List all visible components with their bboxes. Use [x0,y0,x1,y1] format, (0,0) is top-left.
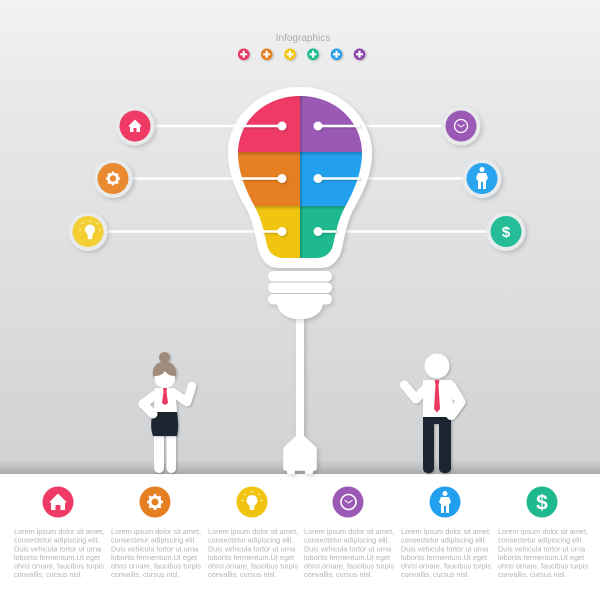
body text: ohrci ornare, faucibus turpis [14,562,104,570]
body text: convallis, cursus nisl. [498,570,567,579]
column: dollar [498,486,588,579]
icon badge: dollar [486,212,526,251]
circle icon: bulb [236,486,268,518]
bulb colour segments [238,96,362,258]
body text: convallis, cursus nisl. [401,570,470,579]
body text: lobortis fermentum.Ut eget [304,553,390,562]
body text: convallis, cursus nisl. [208,570,277,579]
woman shirt and arms [143,386,192,414]
man head [424,354,450,378]
column: bulb [208,486,298,579]
body text: Lorem ipsum dolor sit amet, [304,527,394,536]
man trousers [423,416,451,473]
column: gear [111,486,201,579]
body text: convallis, cursus nisl. [111,570,180,579]
icon badge: person [462,159,502,198]
body text: lobortis fermentum.Ut eget [498,553,584,562]
body text: consectetur adipiscing elit. [498,536,584,545]
bottom white panel [0,474,600,600]
body text: ohrci ornare, faucibus turpis [111,562,201,570]
column: person [401,486,491,579]
man figure [404,354,460,473]
circle icon: clock [332,486,364,518]
body text: Duis vehicula tortor ut urna [401,544,489,553]
icon badge: gear [94,159,132,198]
body text: Lorem ipsum dolor sit amet, [208,527,298,536]
body text: lobortis fermentum.Ut eget [111,553,197,562]
icon badge: dollar: $ [502,224,511,241]
body text: lobortis fermentum.Ut eget [14,553,100,562]
woman tie [162,388,168,405]
screw base [268,271,332,319]
body text: consectetur adipiscing elit. [14,536,100,545]
connector lines and dots inside bulb [240,122,360,236]
column: home [14,486,104,579]
body text: Duis vehicula tortor ut urna [208,544,296,553]
body text: Lorem ipsum dolor sit amet, [14,527,104,536]
body text: ohrci ornare, faucibus turpis [498,562,588,570]
icon badge: bulb [68,212,108,251]
floor shadow band [0,460,600,474]
background wall [0,0,600,474]
man tie [434,380,440,412]
woman figure [143,352,192,473]
icon badge: home [116,106,154,146]
circle icon: home [42,486,74,518]
man shirt and arms [404,380,460,417]
woman skirt [151,412,178,436]
body text: Duis vehicula tortor ut urna [498,544,586,553]
circle icon: gear [140,486,170,518]
title: Infographics [276,33,330,44]
circle icon: dollar: $ [536,492,548,514]
woman hair [153,352,176,385]
body text: consectetur adipiscing elit. [304,536,390,545]
body text: ohrci ornare, faucibus turpis [304,562,394,570]
column: clock [304,486,394,579]
circle icon: person [430,486,460,518]
woman legs [154,432,176,473]
body text: consectetur adipiscing elit. [401,536,487,545]
body text: Duis vehicula tortor ut urna [111,544,199,553]
body text: convallis, cursus nisl. [304,570,373,579]
body text: convallis, cursus nisl. [14,570,83,579]
woman face [154,371,175,388]
body text: lobortis fermentum.Ut eget [401,553,487,562]
body text: consectetur adipiscing elit. [111,536,197,545]
top plus buttons [238,48,365,60]
body text: consectetur adipiscing elit. [208,536,294,545]
body text: Lorem ipsum dolor sit amet, [401,527,491,536]
body text: ohrci ornare, faucibus turpis [401,562,491,570]
body text: Duis vehicula tortor ut urna [14,544,102,553]
cord and plug [284,316,316,474]
body text: Duis vehicula tortor ut urna [304,544,392,553]
bulb white outline [228,87,372,268]
body text: ohrci ornare, faucibus turpis [208,562,298,570]
body text: Lorem ipsum dolor sit amet, [498,527,588,536]
connector lines (outer part) [106,126,488,232]
body text: Lorem ipsum dolor sit amet, [111,527,201,536]
light bulb [228,87,372,268]
body text: lobortis fermentum.Ut eget [208,553,294,562]
icon badge: clock [442,106,480,146]
